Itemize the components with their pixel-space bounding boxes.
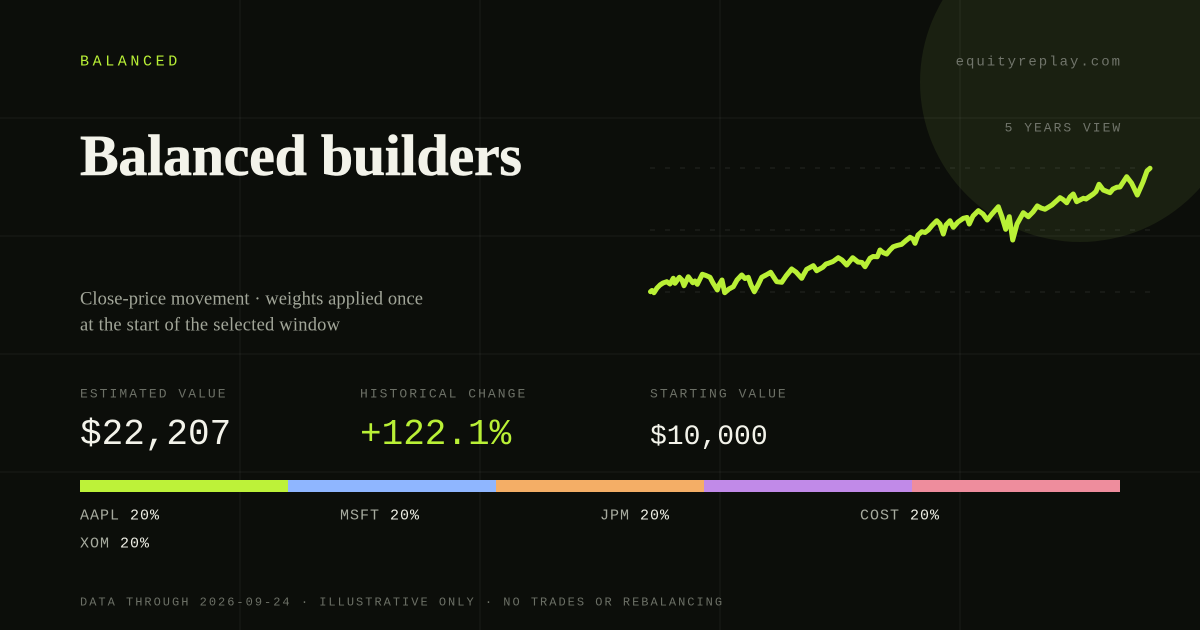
stat: starting value bbox=[650, 386, 788, 453]
allocation legend: JPM 20% bbox=[600, 507, 670, 524]
title: Balanced builders bbox=[80, 123, 522, 188]
stat: historical change bbox=[360, 386, 527, 455]
description: Close-price movement · weights applied once bbox=[80, 290, 423, 310]
line chart bbox=[650, 168, 1150, 293]
footer note: DATA THROUGH 2026-09-24 · ILLUSTRATIVE ONLY · NO TRADES OR REBALANCING bbox=[80, 595, 724, 609]
allocation legend: MSFT 20% bbox=[340, 507, 420, 524]
category label: BALANCED bbox=[80, 53, 181, 70]
decorative glow circle bbox=[920, 0, 1200, 242]
stat: starting value: $10,000 bbox=[650, 422, 768, 453]
allocation legend: AAPL 20% bbox=[80, 507, 160, 524]
stat: historical change: HISTORICAL CHANGE bbox=[360, 386, 527, 401]
allocation bar bbox=[80, 480, 1120, 492]
description bbox=[80, 290, 423, 336]
time window label: 5 YEARS VIEW bbox=[1005, 120, 1122, 135]
description: at the start of the selected window bbox=[80, 316, 341, 336]
allocation legend bbox=[80, 507, 940, 552]
allocation legend: COST 20% bbox=[860, 507, 940, 524]
stat: estimated value bbox=[80, 386, 231, 455]
stat: estimated value: ESTIMATED VALUE bbox=[80, 386, 228, 401]
allocation legend: XOM 20% bbox=[80, 535, 150, 552]
stat: starting value: STARTING VALUE bbox=[650, 386, 788, 401]
stat: historical change: +122.1% bbox=[360, 414, 512, 455]
site name: equityreplay.com bbox=[956, 54, 1122, 70]
stat: estimated value: $22,207 bbox=[80, 414, 231, 455]
